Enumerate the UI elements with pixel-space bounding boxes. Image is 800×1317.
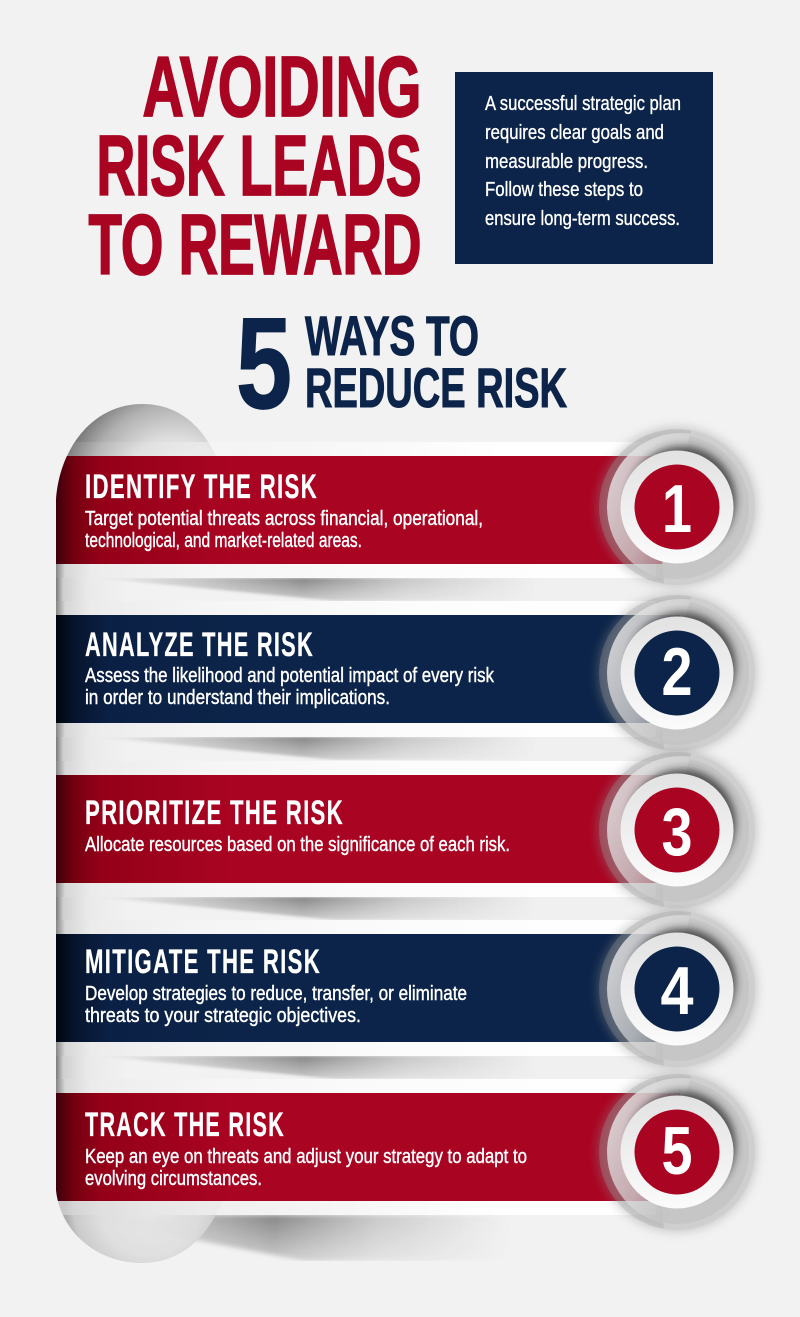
step 1 (56, 427, 757, 601)
step 5 text: TRACK THE RISK (85, 1106, 285, 1144)
step 5 (56, 1072, 757, 1232)
step 4 text (85, 943, 467, 1027)
title: RISK LEADS (96, 119, 422, 214)
step 2 text (85, 626, 495, 709)
step 4 text: MITIGATE THE RISK (85, 943, 321, 981)
bar 3 (56, 775, 680, 883)
step 2 text: in order to understand their implications. (85, 687, 390, 709)
step 3 text: Allocate resources based on the significance of each risk. (85, 834, 510, 856)
step 1 text (85, 468, 483, 552)
step 4 text: Develop strategies to reduce, transfer, or eliminate (85, 983, 467, 1005)
bar 2 (56, 615, 680, 723)
step 1 text: IDENTIFY THE RISK (85, 468, 318, 506)
step 2 text: ANALYZE THE RISK (85, 626, 314, 664)
title (88, 40, 422, 293)
step 1 text: technological, and market-related areas. (85, 530, 362, 552)
subheading (236, 290, 567, 436)
badge 3 (597, 750, 757, 910)
step 4 (56, 909, 757, 1079)
bar 4 (56, 934, 680, 1042)
badge 1 (597, 427, 757, 587)
subheading: REDUCE RISK (305, 356, 567, 419)
step 4 text: threats to your strategic objectives. (85, 1005, 361, 1027)
panel: introduction: A successful strategic plan (485, 92, 681, 115)
subheading: 5 (236, 290, 292, 436)
bar 5 (56, 1093, 680, 1201)
step 5 text: evolving circumstances. (85, 1168, 262, 1190)
badge 2 (597, 593, 757, 753)
step 3 (56, 750, 757, 920)
panel: introduction: Follow these steps to (485, 178, 643, 201)
panel: introduction: measurable progress. (485, 150, 648, 173)
badge 2: 2 (662, 634, 692, 710)
panel: introduction: requires clear goals and (485, 121, 664, 144)
step 3 text: PRIORITIZE THE RISK (85, 794, 344, 832)
step 2 (56, 593, 757, 760)
badge 1: 1 (662, 471, 692, 547)
panel: introduction (455, 72, 713, 264)
step 2 text: Assess the likelihood and potential impact of every risk (85, 665, 495, 687)
title: TO REWARD (88, 198, 422, 293)
subheading: WAYS TO (305, 304, 479, 367)
badge 5 (597, 1072, 757, 1232)
bar 1 (56, 456, 680, 564)
badge 3: 3 (662, 794, 692, 870)
badge 4 (597, 909, 757, 1069)
step 3 text (85, 794, 510, 856)
badge 4: 4 (660, 953, 694, 1029)
step 5 text (85, 1106, 527, 1190)
step 5 text: Keep an eye on threats and adjust your strategy to adapt to (85, 1146, 527, 1168)
capsule backdrop (56, 404, 656, 1263)
panel: introduction: ensure long-term success. (485, 207, 680, 230)
step 1 text: Target potential threats across financial, operational, (85, 508, 483, 530)
title: AVOIDING (142, 40, 422, 135)
badge 5: 5 (662, 1113, 692, 1189)
